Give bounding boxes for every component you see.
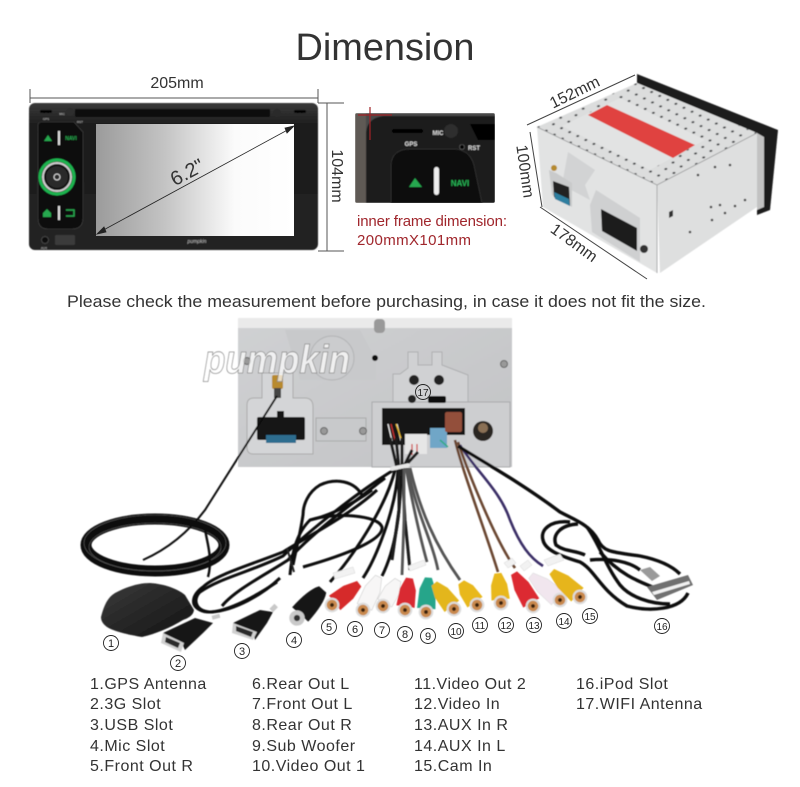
legend: column 2: 7.Front Out L <box>252 696 353 713</box>
RCA 7 white <box>372 576 405 616</box>
caption: inner frame dimension: 200mmX101mm <box>357 232 471 249</box>
GPS antenna coil <box>84 515 226 577</box>
wire bundle from connector <box>390 438 418 570</box>
chassis box <box>537 74 778 273</box>
legend: column 3: 11.Video Out 2 <box>414 676 526 693</box>
width dimension line <box>30 89 318 103</box>
antenna port <box>473 421 493 441</box>
legend: column 1: 5.Front Out R <box>90 758 193 775</box>
RCA 12 yellow <box>489 572 511 611</box>
label: 100mm: 100mm <box>512 144 537 199</box>
number marker digits <box>108 388 668 670</box>
dimension lines <box>527 75 647 279</box>
head unit body: GPS <box>43 117 49 121</box>
screen diagonal arrow <box>97 126 294 234</box>
cable tie <box>390 463 410 471</box>
height dimension line <box>318 103 344 251</box>
icon: USB connector 2 <box>161 614 220 652</box>
legend: column 4: 17.WIFI Antenna <box>576 696 703 713</box>
legend: column 2: 8.Rear Out R <box>252 717 352 734</box>
icon: iPod dock connector <box>640 567 693 600</box>
RCA 9 teal <box>416 577 438 620</box>
label: 205mm: 205mm <box>150 75 204 92</box>
notice text: Please check the measurement before purchasing, in case it does not fit the size. <box>67 292 706 311</box>
RCA connectors <box>321 565 592 620</box>
head unit body: AUX <box>41 246 47 250</box>
legend: column 4 <box>576 676 703 713</box>
label: 104mm: 104mm <box>328 149 345 203</box>
RCA 14 white <box>525 569 572 612</box>
number marker digits: 8 <box>402 629 408 641</box>
number marker digits: 10 <box>450 627 462 638</box>
panel: front view of head unit <box>29 75 345 251</box>
number marker digits: 2 <box>175 658 181 670</box>
number marker digits: 11 <box>475 621 486 632</box>
head unit body: MIC <box>59 112 66 116</box>
left wiring connector <box>257 411 305 443</box>
legend: column 2: 9.Sub Woofer <box>252 738 356 755</box>
number marker digits: 3 <box>239 646 245 658</box>
legend: column 2: 10.Video Out 1 <box>252 758 365 775</box>
legend: column 1 <box>90 676 207 775</box>
legend: column 3: 15.Cam In <box>414 758 492 775</box>
number marker digits: 9 <box>425 631 431 643</box>
number marker digits: 6 <box>352 624 358 636</box>
detail crop photo <box>355 113 495 203</box>
number marker digits: 15 <box>584 612 596 623</box>
antenna lead wire <box>143 396 277 560</box>
head unit body <box>29 103 318 250</box>
detail crop photo: MIC <box>432 131 444 137</box>
grey and dark wires <box>402 468 460 580</box>
icon: GPS puck <box>101 583 194 637</box>
icon: USB connector 3 <box>232 604 278 640</box>
number markers <box>104 384 670 670</box>
right connector block <box>382 408 465 455</box>
head unit body: NAVI <box>65 136 77 142</box>
GPS antenna socket <box>272 375 283 398</box>
number marker digits: 13 <box>528 621 540 632</box>
RCA 6 white <box>353 573 386 620</box>
RCA 15 yellow <box>546 565 592 609</box>
legend: column 1: 1.GPS Antenna <box>90 676 207 693</box>
number marker digits: 5 <box>326 622 332 634</box>
head unit body: pumpkin <box>187 239 207 245</box>
legend: column 3: 13.AUX In R <box>414 717 508 734</box>
number marker digits: 4 <box>291 635 297 647</box>
detail crop photo: NAVI <box>451 179 469 188</box>
caption: inner frame dimension: inner frame dimension: <box>357 213 507 230</box>
legend: column 1: 2.3G Slot <box>90 696 161 713</box>
screen <box>96 124 294 236</box>
panel: 3D side view with dimensions <box>512 74 778 279</box>
legend: column 3 <box>414 676 526 775</box>
legend: column 2 <box>252 676 365 775</box>
RCA 13 red <box>506 569 545 617</box>
title: Dimension <box>296 27 474 69</box>
red crosshair marker <box>358 107 392 140</box>
legend: column 3: 14.AUX In L <box>414 738 506 755</box>
brown and purple wires <box>455 440 543 572</box>
number marker digits: 16 <box>656 622 668 633</box>
label: 178mm: 178mm <box>547 221 600 266</box>
panel: inner frame detail <box>355 107 507 249</box>
number marker digits: 14 <box>558 617 570 628</box>
legend: column 4: 16.iPod Slot <box>576 676 668 693</box>
legend: column 1: 3.USB Slot <box>90 717 173 734</box>
number marker digits: 7 <box>379 625 385 637</box>
label: 6.2 inch: 6.2" <box>167 155 208 191</box>
thick iPod cable and coil <box>458 446 688 609</box>
head unit body: RST <box>77 120 83 124</box>
number marker digits: 17 <box>417 388 429 399</box>
wire labels <box>333 554 564 579</box>
RCA 11 yellow <box>454 577 489 616</box>
number marker digits: 12 <box>500 621 512 632</box>
rear metal panel <box>238 318 512 467</box>
detail crop photo: GPS <box>405 142 417 148</box>
legend: column 2: 6.Rear Out L <box>252 676 350 693</box>
number marker digits: 1 <box>108 638 114 650</box>
legend: column 3: 12.Video In <box>414 696 500 713</box>
legend: column 1: 4.Mic Slot <box>90 738 165 755</box>
label: watermark logo: pumpkin <box>203 338 350 382</box>
RCA 8 red <box>395 577 419 619</box>
RCA 5 red <box>321 577 365 617</box>
main black cables <box>194 468 400 612</box>
RCA 10 yellow <box>427 578 466 620</box>
label: 152mm: 152mm <box>547 74 603 112</box>
detail crop photo: RST <box>468 146 480 152</box>
panel: rear panel and cables photo <box>84 318 693 652</box>
icon: mic jack <box>284 582 331 631</box>
